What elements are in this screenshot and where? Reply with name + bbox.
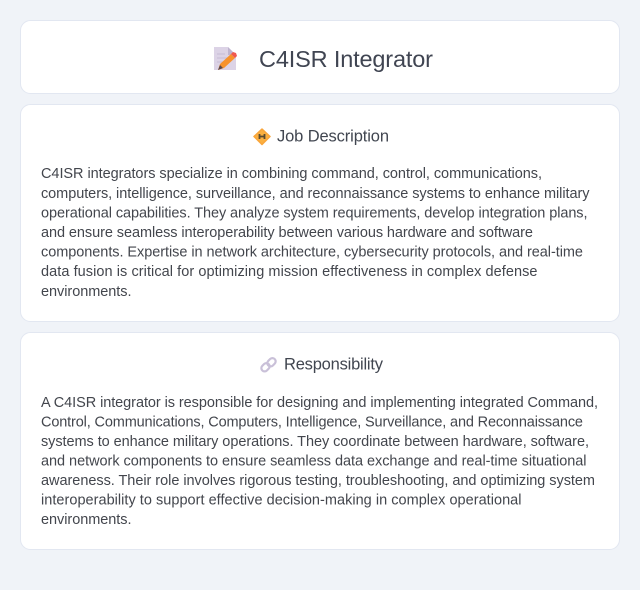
panel: responsibility (20, 332, 620, 550)
icon: chain link (260, 357, 277, 373)
text block: responsibility: interoperability to support effective decision-making in complex operational (41, 492, 522, 508)
text block: job description (41, 166, 590, 300)
text block: responsibility: systems to enhance military operations. They coordinate between hardware, software, (41, 434, 589, 450)
text block: job description: components. Expertise in network architecture, cybersecurity protocols, and real-time (41, 244, 583, 260)
text block: responsibility: Control, Communications, Computers, Intelligence, Surveillance, and Reconnaissance (41, 414, 583, 430)
text block: job description: data fusion is critical for optimizing mission effectiveness in complex defense (41, 264, 538, 280)
text block: job description: and ensure seamless interoperability between various hardware and software (41, 225, 533, 241)
heading: job description: Job Description (277, 128, 389, 146)
text block: job description: operational capabilities. They analyze system requirements, develop integration plans, (41, 206, 588, 222)
panel: title card (20, 20, 620, 94)
text block: responsibility: A C4ISR integrator is responsible for designing and implementing integrated Command, (41, 395, 598, 411)
panel: job description (20, 104, 620, 322)
text block: job description: environments. (41, 284, 132, 300)
text block: responsibility: and network components to ensure seamless data exchange and real-time situational (41, 454, 586, 470)
text block: job description: computers, intelligence, surveillance, and reconnaissance systems to enhance military (41, 186, 590, 202)
icon: document with pencil (214, 47, 237, 70)
text block: responsibility: environments. (41, 512, 132, 528)
icon: orange diamond sign (254, 129, 270, 144)
text block: responsibility: awareness. Their role involves rigorous testing, troubleshooting, and optimizing system (41, 473, 595, 489)
heading: responsibility: Responsibility (284, 356, 384, 374)
text block: job description: C4ISR integrators specialize in combining command, control, communications, (41, 166, 542, 182)
text block: responsibility (41, 395, 598, 528)
title: C4ISR Integrator (259, 46, 433, 72)
